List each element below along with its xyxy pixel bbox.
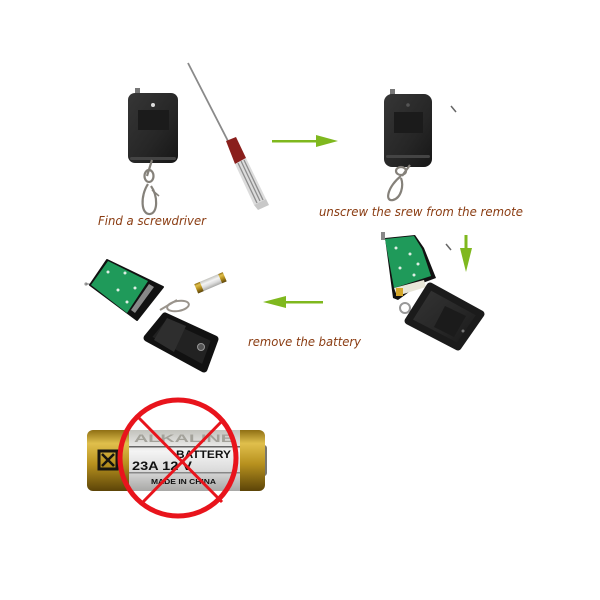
opened remote (step 3) xyxy=(381,232,481,347)
remote with keychain (step 1) xyxy=(128,88,178,214)
arrow: down xyxy=(460,235,472,272)
disassembled remote with battery (step 4) xyxy=(84,260,215,369)
arrow: left xyxy=(263,296,323,308)
icon: screw near opened remote xyxy=(446,244,451,250)
battery body xyxy=(87,430,267,491)
small battery xyxy=(194,272,227,293)
remote with screw removed (step 2) xyxy=(384,89,432,200)
large 23A battery crossed out xyxy=(87,400,267,516)
caption: remove the battery: remove the battery xyxy=(248,335,362,349)
caption: unscrew: unscrew the srew from the remote xyxy=(319,205,523,219)
icon: screw xyxy=(451,106,456,112)
arrow: right xyxy=(272,135,338,147)
battery labels: 23A 12 V xyxy=(132,459,192,473)
screwdriver xyxy=(188,63,269,210)
prohibition sign xyxy=(120,400,236,516)
caption: find a screwdriver: Find a screwdriver xyxy=(98,214,207,228)
battery labels: MADE IN CHINA xyxy=(151,477,217,486)
battery labels xyxy=(132,433,234,486)
battery labels: BATTERY xyxy=(176,449,232,461)
battery labels: ALKALINE xyxy=(134,433,234,445)
